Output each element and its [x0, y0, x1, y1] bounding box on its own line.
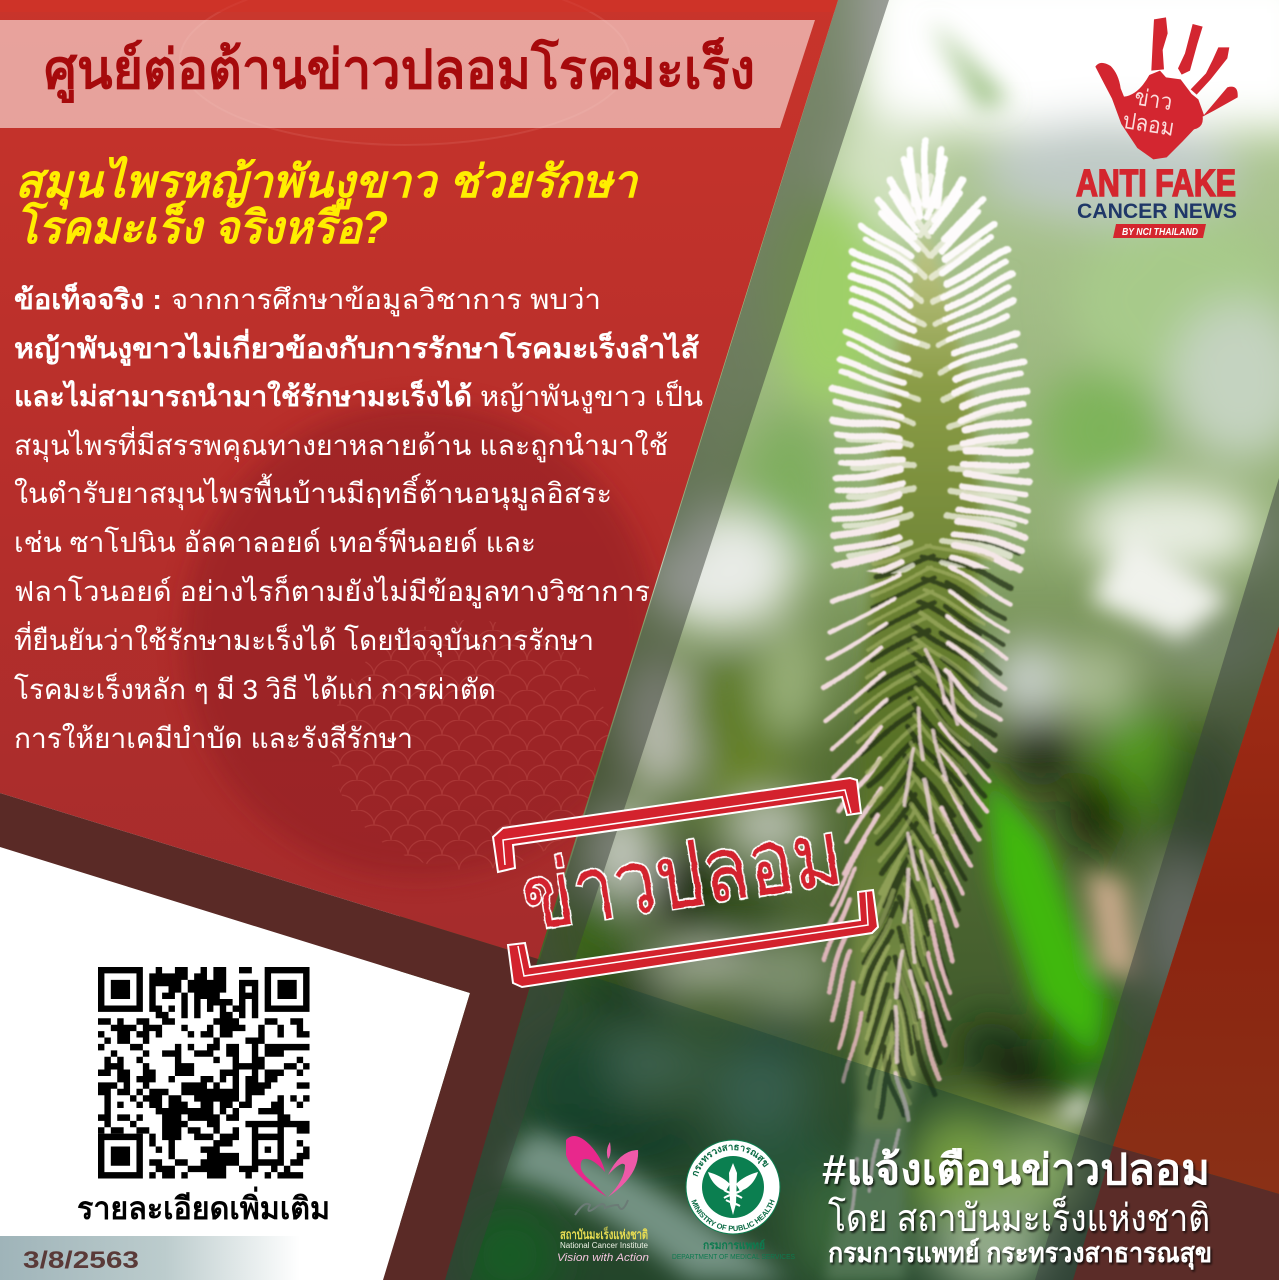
body text: fact check: สมุนไพรที่มีสรรพคุณทางยาหลายด้าน และถูกนำมาใช้ — [14, 426, 668, 463]
brown frame around white area — [0, 793, 538, 1280]
seal green disc — [702, 1156, 764, 1218]
body text: fact check: โรคมะเร็งหลัก ๆ มี 3 วิธี ได้แก่ การผ่าตัด — [14, 672, 496, 705]
yellow question heading — [15, 155, 639, 253]
plant lower pink bristles — [820, 565, 1023, 1084]
date text: 3/8/2563 — [23, 1247, 139, 1274]
hashtag footer: โดย สถาบันมะเร็งแห่งชาติ — [828, 1195, 1210, 1240]
hand text — [1121, 82, 1180, 141]
faint cell at top — [205, 0, 605, 146]
plant core — [850, 230, 982, 1130]
stamp top bracket — [493, 778, 861, 872]
icon: pink butterfly heart — [566, 1136, 638, 1197]
body text: fact check — [14, 282, 703, 754]
by nci badge — [1113, 224, 1206, 238]
hand text: ข่าว — [1133, 84, 1174, 115]
lower right brown panel — [1073, 1146, 1279, 1280]
stamp top inner line — [503, 790, 851, 865]
body text: fact check: ข้อเท็จจริง : — [14, 282, 162, 315]
body text: fact check: และไม่สามารถนำมาใช้รักษามะเร็งได้ — [14, 379, 472, 412]
body text: fact check: หญ้าพันงูขาว เป็น — [480, 379, 703, 414]
dms english name: DEPARTMENT OF MEDICAL SERVICES — [672, 1252, 795, 1261]
cancer news wordmark: CANCER NEWS — [1077, 200, 1237, 223]
body text: fact check: การให้ยาเคมีบำบัด และรังสีรักษา — [14, 722, 413, 754]
nci scribble signature — [575, 1200, 628, 1215]
plant inner pink bristles — [850, 650, 960, 1220]
body text: fact check: ในตำรับยาสมุนไพรพื้นบ้านมีฤทธิ์ต้านอนุมูลอิสระ — [14, 473, 612, 511]
plant bristles layer — [822, 140, 1028, 1220]
plant upper outer bristles — [828, 136, 1034, 575]
stamp text: ข่าวปลอม — [515, 803, 848, 950]
cancer cell illustration — [182, 402, 658, 878]
body text: fact check: หญ้าพันงูขาวไม่เกี่ยวข้องกับการรักษาโรคมะเร็งลำไส้ — [14, 328, 700, 366]
seal ring text: MINISTRY OF PUBLIC HEALTH — [691, 1199, 775, 1231]
QR caption: รายละเอียดเพิ่มเติม — [77, 1186, 330, 1226]
plant: white bristled grass spike — [822, 140, 1028, 1280]
body text: fact check: ฟลาโวนอยด์ อย่างไรก็ตามยังไม่มีข้อมูลทางวิชาการ — [14, 574, 650, 609]
logo: national cancer institute — [557, 1136, 649, 1264]
hand text: ปลอม — [1121, 107, 1176, 141]
body text: fact check: เช่น ซาโปนิน อัลคาลอยด์ เทอร์พีนอยด์ และ — [14, 526, 536, 558]
hashtag footer: #แจ้งเตือนข่าวปลอม — [822, 1146, 1210, 1193]
photo background: blurred foliage — [400, 0, 1279, 1280]
logo: anti fake cancer news — [1076, 17, 1238, 238]
photo overlay band: lower right translucent strip — [1035, 478, 1279, 1280]
hashtag footer — [822, 1146, 1212, 1270]
right red panel — [1113, 626, 1279, 1194]
seal ring text — [691, 1144, 775, 1231]
by nci badge: BY NCI THAILAND — [1122, 227, 1198, 238]
plant upper white inner bristles — [841, 172, 1020, 575]
body text: fact check: ที่ยืนยันว่าใช้รักษามะเร็งได้ โดยปัจจุบันการรักษา — [14, 621, 594, 658]
stamp bottom bracket — [508, 890, 878, 987]
nci english name: National Cancer Institute — [560, 1241, 649, 1250]
dms thai name: กรมการแพทย์ — [703, 1239, 765, 1252]
anti fake wordmark: ANTI FAKE — [1076, 163, 1236, 205]
panel: white QR area — [0, 847, 470, 1280]
nci slogan: Vision with Action — [557, 1252, 649, 1264]
stamp bottom inner line — [518, 892, 868, 976]
icon: caduceus with wings — [708, 1163, 758, 1215]
plant dark gaps — [854, 538, 1022, 1120]
title text: ศูนย์ต่อต้านข่าวปลอมโรคมะเร็ง — [44, 38, 755, 103]
yellow question heading: โรคมะเร็ง จริงหรือ? — [15, 200, 388, 253]
date strip — [0, 1236, 300, 1280]
yellow question heading: สมุนไพรหญ้าพันงูขาว ช่วยรักษา — [15, 155, 639, 210]
icon: red hand print — [1095, 17, 1238, 159]
photo overlay: dark teal lower band — [445, 959, 1113, 1280]
title band — [0, 20, 815, 128]
QR code — [98, 967, 310, 1179]
photo overlay band: translucent grey strip — [440, 0, 889, 1280]
plant inner green scales — [854, 543, 994, 1108]
panel: red content background — [0, 0, 840, 959]
stamp: fake news — [493, 778, 878, 987]
logo: ministry of public health — [672, 1140, 795, 1261]
plant stem — [825, 1110, 905, 1280]
hashtag footer: กรมการแพทย์ กระทรวงสาธารณสุข — [828, 1237, 1212, 1270]
nci thai name: สถาบันมะเร็งแห่งชาติ — [560, 1225, 648, 1242]
body text: fact check: จากการศึกษาข้อมูลวิชาการ พบว่า — [171, 284, 601, 317]
seal ring text: กระทรวงสาธารณสุข — [692, 1144, 769, 1176]
seal ring — [686, 1140, 780, 1234]
